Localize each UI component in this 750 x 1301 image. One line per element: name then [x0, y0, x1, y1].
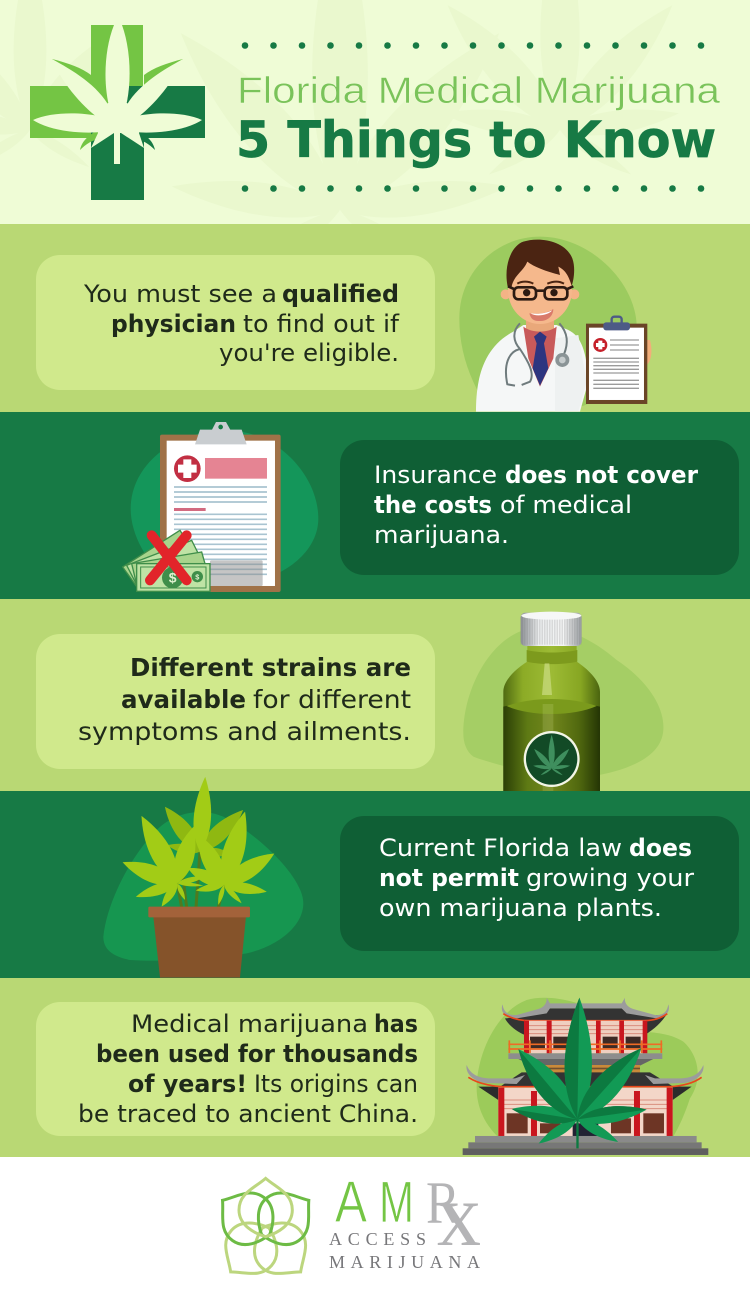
callout 3: for different — [253, 685, 411, 714]
callout 1 — [36, 255, 435, 390]
callout 2: marijuana. — [374, 521, 509, 549]
logo: wordmark: MARIJUANA — [329, 1252, 480, 1272]
callout 3 — [36, 634, 435, 769]
callout 1: You must see a — [83, 280, 277, 308]
footer panel — [0, 1157, 750, 1301]
icon: potted plant — [103, 776, 303, 978]
callout 1: to find out if — [243, 310, 400, 338]
logo: wordmark: x — [437, 1166, 481, 1265]
callout 3: symptoms and ailments. — [78, 717, 411, 746]
lower storey — [463, 1065, 708, 1155]
icon: medical bill with crossed-out money — [123, 422, 318, 592]
callout 5: of years! — [128, 1070, 247, 1098]
callout 4: Current Florida law — [379, 834, 622, 862]
logo: wordmark: M — [379, 1170, 414, 1235]
callout 2: the costs — [374, 491, 492, 519]
callout 2: does not cover — [505, 461, 698, 489]
icon: medical bill with crossed-out money: $ — [169, 570, 177, 586]
header panel — [0, 0, 750, 281]
callout 4 — [340, 816, 739, 951]
callout 5: has — [374, 1010, 418, 1038]
callout 2: Insurance — [374, 461, 497, 489]
callout 2 — [340, 440, 739, 575]
callout 5: Its origins can — [254, 1070, 418, 1098]
logo: wordmark: A — [335, 1170, 367, 1235]
panel 3: strains — [0, 599, 750, 791]
logo: wordmark: ACCESS — [329, 1229, 426, 1249]
callout 4: does — [629, 834, 692, 862]
panel 5: history — [0, 978, 750, 1157]
title: 5 Things to Know — [236, 111, 716, 169]
logo: cross with leaf — [30, 25, 205, 200]
icon: doctor with clipboard — [459, 237, 651, 412]
panel 4: growing law — [0, 776, 750, 978]
logo: wordmark: R — [426, 1170, 460, 1236]
callout 3: available — [121, 685, 246, 714]
callout 5: been used for thousands — [96, 1040, 418, 1068]
panel 1: qualified physician — [0, 224, 750, 412]
callout 4: growing your — [526, 864, 694, 892]
icon: pagoda with leaf — [463, 997, 708, 1155]
callout 1: you're eligible. — [219, 339, 399, 367]
leaf — [509, 997, 651, 1148]
callout 4: own marijuana plants. — [379, 894, 662, 922]
upper storey — [502, 998, 669, 1073]
title: Florida Medical Marijuana — [237, 70, 720, 111]
logo: flower mark — [207, 1178, 324, 1289]
title — [236, 70, 720, 169]
icon: medical bill with crossed-out money: $ — [195, 572, 199, 581]
callout 4: not permit — [379, 864, 519, 892]
callout 5: be traced to ancient China. — [78, 1100, 418, 1128]
callout 1: qualified — [282, 280, 399, 308]
callout 5: Medical marijuana — [131, 1010, 368, 1038]
callout 5 — [36, 1002, 435, 1136]
callout 3: Different strains are — [130, 653, 411, 682]
callout 1: physician — [111, 310, 236, 338]
bottom dotted rule — [242, 185, 704, 192]
logo: wordmark — [329, 1166, 481, 1272]
icon: oil bottle — [463, 612, 663, 791]
panel 2: insurance — [0, 412, 750, 599]
background leaf pattern — [0, 0, 686, 281]
callout 2: of medical — [500, 491, 632, 519]
top dotted rule — [242, 42, 704, 49]
